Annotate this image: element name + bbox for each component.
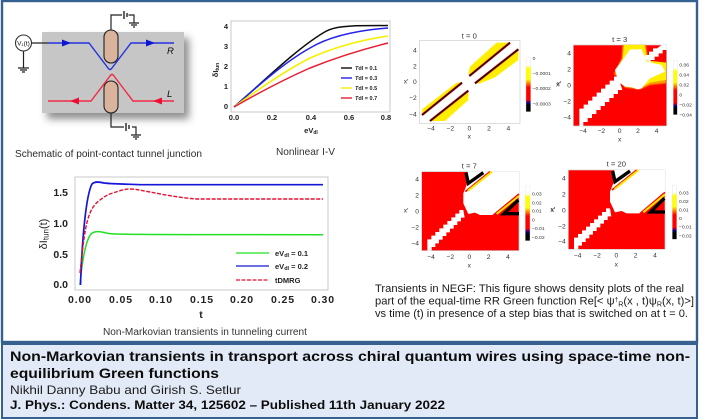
legend: = 0.2	[289, 262, 308, 271]
density plot t = 3: x′	[556, 82, 561, 89]
text block: NEGF description	[375, 283, 694, 320]
icon: voltage source	[16, 35, 32, 51]
colour bar: 0	[532, 218, 535, 224]
chart: tunneling current transients: δI	[38, 240, 50, 249]
caption: transients: Non-Markovian transients in tunneling current	[103, 327, 307, 338]
legend: eV	[275, 262, 284, 271]
edge channel L: L	[167, 89, 172, 100]
density plot t = 0: 4	[506, 125, 510, 132]
text block: NEGF description: †	[615, 296, 619, 304]
text: authors: Nikhil Danny Babu and Girish S. Setlur	[10, 383, 241, 397]
chart: nonlinear I-V: 0.4	[306, 113, 317, 122]
density plot t = 3: x	[618, 136, 622, 143]
density plot t = 20	[550, 160, 692, 268]
edge channel R: R	[167, 46, 174, 57]
text block: NEGF description: vs time (t) in presence of a step bias that is switched on at t = 0.	[375, 308, 688, 320]
caption: schematic: Schematic of point-contact tunnel junction	[15, 149, 202, 160]
density plot t = 20: 0	[562, 207, 566, 214]
colour bar: −0.04	[679, 113, 692, 119]
density plot t = 7: t = 7	[462, 161, 477, 170]
density plot t = 7: 4	[415, 177, 419, 184]
chart: nonlinear I-V: 0.0	[229, 113, 239, 122]
density plot t = 3: 4	[567, 50, 571, 57]
density plot t = 7: −4	[411, 241, 419, 248]
colour bar	[673, 61, 692, 119]
legend: dl	[284, 266, 290, 272]
chart: nonlinear I-V: 0.6	[344, 113, 354, 122]
density plot t = 3: 0	[567, 82, 571, 89]
chart: nonlinear I-V: eV	[304, 126, 313, 135]
legend	[236, 249, 308, 285]
heading: title: Non-Markovian transients in transport across chiral quantum wires using space-time non-	[10, 349, 690, 365]
density plot t = 7: 0	[467, 254, 471, 261]
colour bar: 0.02	[532, 200, 542, 206]
heading: title: equilibrium Green functions	[10, 366, 219, 382]
colour bar: −0.02	[679, 103, 692, 109]
chart: tunneling current transients: 1.5	[53, 187, 68, 199]
density plot t = 20: 2	[634, 253, 638, 260]
colour bar: −0.01	[532, 226, 545, 232]
density plot t = 0: 2	[413, 63, 417, 70]
density plot t = 0: −2	[447, 125, 454, 132]
density plot t = 0: 4	[413, 47, 417, 54]
heading: title	[10, 349, 690, 382]
legend: dl	[284, 253, 290, 259]
colour bar	[672, 185, 692, 239]
chart: nonlinear I-V: 0	[224, 102, 228, 111]
text block: NEGF description: R	[657, 302, 662, 308]
density plot t = 3: 0	[618, 128, 622, 135]
density plot t = 7	[404, 161, 556, 270]
density plot t = 20: −2	[593, 253, 601, 260]
colour bar: 0.04	[679, 73, 689, 79]
chart: nonlinear I-V: dl	[313, 130, 318, 136]
colour bar: 0.02	[679, 199, 689, 205]
density plot t = 3: −4	[579, 128, 587, 135]
chart: tunneling current transients: 0.25	[271, 294, 295, 306]
chart: nonlinear I-V	[211, 21, 391, 136]
chart: tunneling current transients: 0.20	[230, 294, 254, 306]
colour bar: 0	[533, 56, 536, 62]
chart: tunneling current transients: t	[199, 309, 203, 321]
legend: eV	[275, 249, 284, 258]
colour bar: x′	[557, 80, 562, 87]
density plot t = 7: 0	[415, 209, 419, 216]
density plot t = 3: −4	[563, 114, 571, 121]
density plot t = 3: 4	[655, 128, 659, 135]
panel: schematic of tunnel junction	[16, 11, 189, 139]
chart: tunneling current transients: 0.30	[311, 294, 335, 306]
density plot t = 7: 2	[415, 193, 419, 200]
density plot t = 3: −2	[563, 98, 571, 105]
colour bar: −0.01	[679, 225, 692, 231]
density plot t = 7: −4	[427, 254, 435, 261]
density plot t = 7: 4	[506, 254, 510, 261]
chart: tunneling current transients: 0.00	[68, 294, 92, 306]
density plot t = 7: −2	[411, 225, 419, 232]
legend: Tdl = 0.5	[355, 86, 377, 92]
density plot t = 0: 0	[467, 125, 471, 132]
density plot t = 0: 0	[413, 79, 417, 86]
text block: NEGF description: (x , t)ψ	[623, 296, 657, 308]
density plot t = 0: t = 0	[462, 32, 477, 41]
density plot t = 20: 4	[562, 175, 566, 182]
density plot t = 0: x′	[404, 78, 409, 85]
density plot t = 20: 0	[614, 253, 618, 260]
legend: = 0.1	[289, 249, 308, 258]
density plot t = 7: −2	[447, 254, 454, 261]
colour bar: 0	[679, 216, 682, 222]
density plot t = 3	[556, 35, 692, 143]
colour bar: 0.01	[679, 207, 689, 213]
chart: nonlinear I-V: 4	[224, 22, 229, 31]
edge channel R	[48, 40, 174, 70]
density plot t = 20: 2	[562, 191, 566, 198]
colour bar: 0.06	[679, 63, 689, 69]
colour bar: −0.02	[532, 235, 545, 241]
colour bar: 0.01	[532, 209, 542, 215]
caption: nonlinear I-V: Nonlinear I-V	[276, 146, 335, 158]
density plot t = 20: 4	[653, 253, 657, 260]
colour bar	[525, 186, 556, 241]
legend: Tdl = 0.1	[355, 66, 377, 72]
density plot t = 20: −4	[558, 239, 566, 246]
chart: nonlinear I-V: 0.2	[267, 113, 277, 122]
colour bar: −0.02	[679, 233, 692, 239]
panel: citation	[2, 344, 697, 418]
colour bar: −0.0003	[533, 102, 551, 108]
density plot t = 20: −4	[574, 253, 582, 260]
density plot t = 0: −4	[427, 125, 435, 132]
chart: tunneling current transients: 0.0	[53, 279, 68, 291]
text: journal reference: J. Phys.: Condens. Matter 34, 125602 – Published 11th January 2022	[10, 398, 445, 412]
chart: nonlinear I-V: δI	[211, 71, 220, 77]
colour bar: 0	[679, 93, 682, 99]
chart: tunneling current transients: 0.5	[53, 249, 68, 261]
density plot t = 7: 2	[487, 254, 491, 261]
colour bar: 0.03	[679, 190, 689, 196]
legend: tDMRG	[275, 276, 301, 285]
text block: NEGF description: (x, t)>]	[662, 296, 694, 308]
chart: tunneling current transients: 0.10	[149, 294, 173, 306]
colour bar: −0.0002	[533, 86, 551, 92]
density plot t = 0: −2	[409, 95, 417, 102]
density plot t = 20: x′	[550, 207, 556, 214]
density plot t = 3: −2	[598, 128, 605, 135]
density plot t = 0: x	[468, 133, 472, 140]
density plot t = 0: −4	[409, 111, 417, 118]
colour bar: 0.03	[532, 191, 542, 197]
chart: tunneling current transients: 1.0	[53, 218, 68, 230]
colour bar: x′	[551, 206, 556, 213]
chart: tunneling current transients: (t)	[38, 219, 50, 229]
panel: figures frame	[2, 1, 697, 342]
legend: Tdl = 0.7	[355, 96, 377, 102]
chart: tunneling current transients: 0.05	[109, 294, 133, 306]
colour bar	[526, 56, 562, 112]
gate electrodes	[104, 30, 118, 113]
density plot t = 3: 2	[636, 128, 640, 135]
colour bar: −0.0001	[533, 71, 551, 77]
chart: nonlinear I-V: 2	[224, 62, 228, 71]
chart: tunneling current transients: 0.15	[190, 294, 214, 306]
chart: tunneling current transients	[38, 177, 335, 321]
density plot t = 7: x	[468, 263, 472, 270]
chart: nonlinear I-V: 0.8	[381, 113, 391, 122]
density plot t = 0: 2	[487, 125, 491, 132]
edge channel L	[48, 74, 174, 104]
text block: NEGF description: Transients in NEGF: This figure shows density plots of the real	[375, 283, 684, 295]
density plot t = 3: t = 3	[612, 35, 627, 44]
text block: NEGF description: R	[618, 302, 623, 308]
chart: nonlinear I-V: tun	[215, 63, 221, 71]
chart: nonlinear I-V: 1	[224, 82, 228, 91]
colour bar: 0.02	[679, 83, 689, 89]
density plot t = 20: −2	[558, 223, 566, 230]
legend	[341, 66, 377, 102]
legend: Tdl = 0.3	[355, 76, 377, 82]
icon: voltage source: V₁(t)	[17, 40, 30, 48]
chart: tunneling current transients: tun	[42, 229, 50, 240]
density plot t = 20: x	[615, 261, 619, 268]
density plot t = 20: t = 20	[607, 160, 626, 169]
density plot t = 3: 2	[567, 66, 571, 73]
density plot t = 7: x′	[404, 208, 409, 215]
text block: NEGF description: part of the equal-time RR Green function Re[< ψ	[375, 296, 611, 308]
chart: nonlinear I-V: 3	[224, 42, 228, 51]
density plot t = 0	[404, 32, 562, 140]
